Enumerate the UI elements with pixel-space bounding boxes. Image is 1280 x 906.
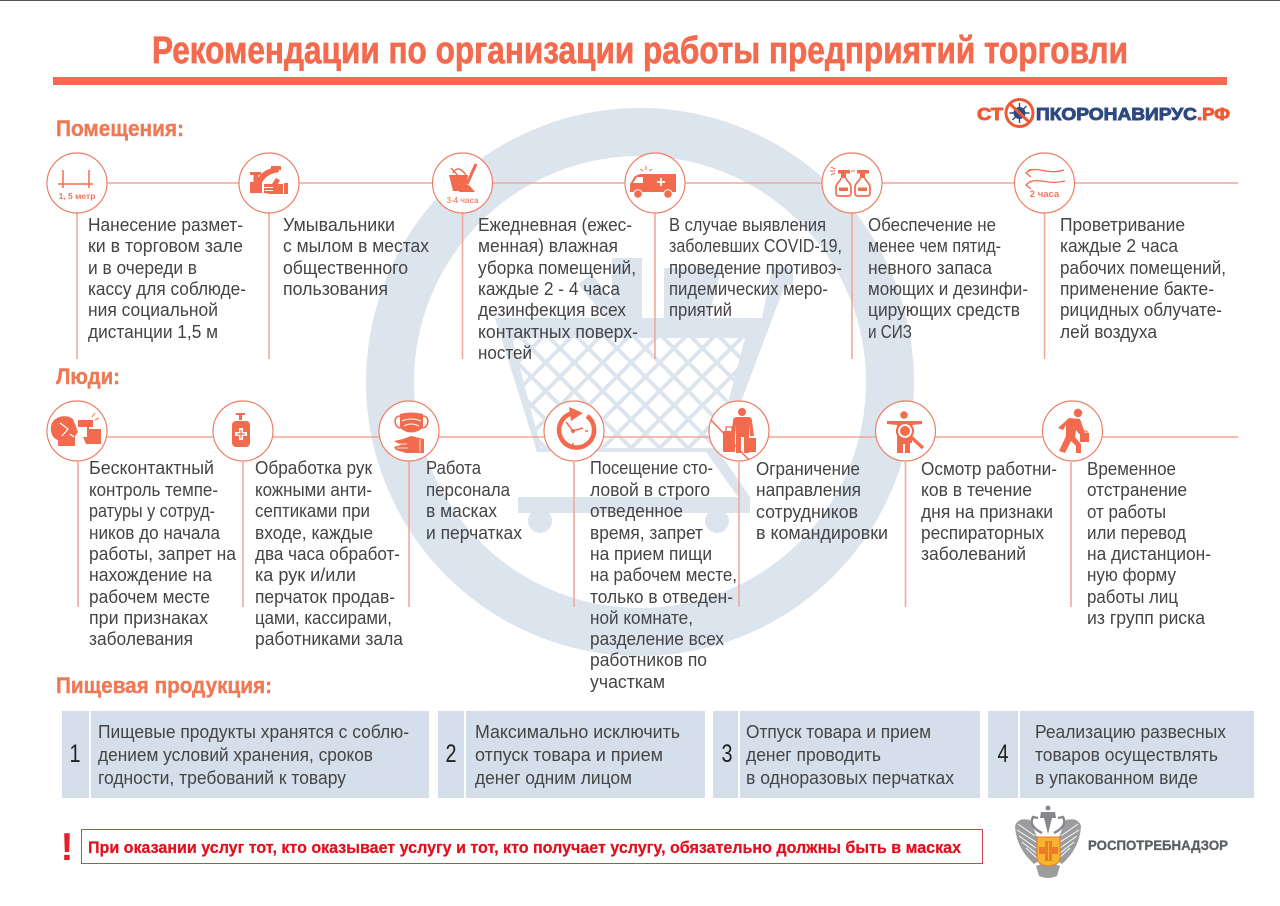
panel: food rule 1 bbox=[62, 711, 429, 798]
heading: premises: Помещения: bbox=[56, 116, 184, 141]
text: canteen: участкам bbox=[590, 671, 665, 692]
text: hand treatment: работниками зала bbox=[255, 628, 404, 649]
text: cleaning bbox=[478, 214, 638, 363]
panel: food rule 1: годности, требований к товару bbox=[98, 767, 347, 788]
text: canteen: на рабочем месте, bbox=[590, 564, 737, 585]
icon: bucket and mop: 3-4 часа bbox=[447, 196, 479, 205]
text: staff inspection: ков в течение bbox=[921, 479, 1032, 500]
text: wash basins: Умывальники bbox=[283, 214, 395, 235]
text: removal from work: ную форму bbox=[1087, 564, 1177, 585]
logo: rospotrebnadzor eagle bbox=[1015, 806, 1081, 878]
panel: food rule 4: Реализацию развесных bbox=[1035, 721, 1227, 742]
text: supplies: моющих и дезинфи- bbox=[868, 278, 1028, 299]
icon: contactless thermometer bbox=[47, 401, 107, 461]
text: business trips bbox=[756, 458, 888, 543]
text: marking: и в очереди в bbox=[88, 257, 197, 278]
text: temperature control: при признаках bbox=[89, 607, 209, 628]
text: covid response: проведение противоэ- bbox=[669, 257, 842, 278]
text: masks and gloves: персонала bbox=[426, 479, 511, 500]
text: canteen: время, запрет bbox=[590, 522, 703, 543]
icon: ambulance van bbox=[625, 153, 685, 213]
panel: food rule 3: Отпуск товара и прием bbox=[746, 721, 931, 742]
text: cleaning: Ежедневная (ежес- bbox=[478, 214, 632, 235]
panel: food rule 3: денег проводить bbox=[746, 744, 881, 765]
text: covid response: приятий bbox=[669, 299, 732, 320]
text: masks and gloves: и перчатках bbox=[426, 522, 523, 543]
panel: food rule 3: 3 bbox=[722, 740, 732, 768]
text: masks and gloves bbox=[426, 457, 523, 543]
text: masks and gloves: Работа bbox=[426, 457, 482, 478]
panel: premises timeline bbox=[47, 153, 1238, 363]
text: supplies: Обеспечение не bbox=[868, 214, 996, 235]
text: covid response: В случае выявления bbox=[669, 214, 826, 235]
icon: sanitizer bottle bbox=[213, 401, 273, 461]
icon: spray bottles bbox=[822, 153, 882, 213]
panel: food rule 2: 2 bbox=[446, 740, 456, 768]
heading: food products: Пищевая продукция: bbox=[56, 673, 272, 698]
panel: food rule 1: дением условий хранения, сроков bbox=[98, 744, 373, 765]
callout: mask warning: При оказании услуг тот, кто оказывает услугу и тот, кто получает услугу, обязательно должны быть в масках bbox=[88, 838, 962, 857]
logo text: rospotrebnadzor: РОСПОТРЕБНАДЗОР bbox=[1088, 838, 1228, 853]
text: business trips: Ограничение bbox=[756, 458, 860, 479]
panel: food rule 2 bbox=[438, 711, 705, 798]
text: business trips: сотрудников bbox=[756, 501, 858, 522]
text: hand treatment: септиками при bbox=[255, 500, 370, 521]
title underline bar bbox=[53, 77, 1227, 85]
panel: food rule 4: в упакованном виде bbox=[1035, 767, 1198, 788]
text: wash basins: пользования bbox=[283, 278, 388, 299]
callout: mask warning: ! bbox=[60, 826, 74, 869]
text: marking: Нанесение размет- bbox=[88, 214, 243, 235]
text: covid response: заболевших COVID-19, bbox=[669, 235, 842, 256]
text: temperature control: рабочем месте bbox=[89, 586, 210, 607]
icon: person leaving with bag bbox=[1042, 401, 1102, 461]
panel: food rule 3: в одноразовых перчатках bbox=[746, 767, 955, 788]
icon: distance marking: 1, 5 метр bbox=[59, 191, 95, 201]
text: removal from work: отстранение bbox=[1087, 479, 1187, 500]
text: business trips: направления bbox=[756, 479, 861, 500]
text: staff inspection: дня на признаки bbox=[921, 501, 1053, 522]
text: removal from work: Временное bbox=[1087, 458, 1176, 479]
text: removal from work: из групп риска bbox=[1087, 607, 1206, 628]
text: hand treatment: цами, кассирами, bbox=[255, 607, 392, 628]
text: ventilation: рицидных облучате- bbox=[1060, 299, 1222, 320]
text: hand treatment: два часа обработ- bbox=[255, 543, 400, 564]
panel: food rule 2: отпуск товара и прием bbox=[475, 744, 663, 765]
text: ventilation bbox=[1060, 214, 1226, 342]
panel: people timeline bbox=[47, 401, 1238, 692]
text: hand treatment: перчаток продав- bbox=[255, 586, 395, 607]
panel: food rule 3 bbox=[713, 711, 980, 798]
text: cleaning: каждые 2 - 4 часа bbox=[478, 278, 621, 299]
text: canteen: Посещение сто- bbox=[590, 457, 713, 478]
text: removal from work: от работы bbox=[1087, 501, 1166, 522]
icon: distance marking bbox=[47, 153, 107, 213]
text: hand treatment: Обработка рук bbox=[255, 457, 373, 478]
text: removal from work bbox=[1087, 458, 1211, 628]
text: marking: кассу для соблюде- bbox=[88, 278, 246, 299]
callout: mask warning bbox=[60, 826, 982, 869]
text: staff inspection: Осмотр работни- bbox=[921, 458, 1057, 479]
text: cleaning: менная) влажная bbox=[478, 235, 618, 256]
text: marking bbox=[88, 214, 246, 342]
text: covid response: пидемических меро- bbox=[669, 278, 828, 299]
logo: stopcoronavirus: .РФ bbox=[1197, 104, 1230, 124]
watermark: shopping cart in a ring bbox=[390, 132, 890, 632]
text: removal from work: или перевод bbox=[1087, 522, 1186, 543]
text: temperature control: ратуры у сотруд- bbox=[89, 500, 215, 521]
icon: mask and gloves bbox=[379, 401, 439, 461]
panel: food rule 2: Максимально исключить bbox=[475, 721, 680, 742]
panel: food rule 4 bbox=[988, 711, 1254, 798]
icon: body inspection bbox=[876, 401, 936, 461]
panel: food rule 4: товаров осуществлять bbox=[1035, 744, 1218, 765]
text: marking: ния социальной bbox=[88, 299, 218, 320]
text: temperature control: нахождение на bbox=[89, 564, 213, 585]
text: temperature control: ников до начала bbox=[89, 522, 221, 543]
icon: tap and hand bbox=[239, 153, 299, 213]
text: cleaning: уборка помещений, bbox=[478, 257, 636, 278]
text: wash basins bbox=[283, 214, 430, 299]
text: staff inspection: респираторных bbox=[921, 522, 1045, 543]
text: hand treatment: входе, каждые bbox=[255, 522, 373, 543]
heading: people: Люди: bbox=[56, 364, 120, 389]
text: cleaning: контактных поверх- bbox=[478, 321, 638, 342]
text: canteen: на прием пищи bbox=[590, 543, 712, 564]
text: hand treatment: кожными анти- bbox=[255, 479, 372, 500]
text: canteen bbox=[590, 457, 737, 692]
text: wash basins: общественного bbox=[283, 257, 408, 278]
text: canteen: разделение всех bbox=[590, 628, 725, 649]
text: ventilation: рабочих помещений, bbox=[1060, 257, 1226, 278]
text: canteen: отведенное bbox=[590, 500, 683, 521]
icon: clock with arrow bbox=[544, 401, 604, 461]
icon: traveller crossed out bbox=[709, 401, 769, 461]
text: business trips: в командировки bbox=[756, 522, 888, 543]
text: marking: ки в торговом зале bbox=[88, 235, 243, 256]
panel: food rule 2: денег одним лицом bbox=[475, 767, 632, 788]
logo: stopcoronavirus: СТ bbox=[977, 104, 1003, 124]
panel: food rule 1: Пищевые продукты хранятся с соблю- bbox=[98, 721, 409, 742]
text: ventilation: лей воздуха bbox=[1060, 321, 1158, 342]
text: temperature control: контроль темпе- bbox=[89, 479, 218, 500]
text: hand treatment bbox=[255, 457, 404, 649]
text: hand treatment: ка рук и/или bbox=[255, 564, 356, 585]
text: masks and gloves: в масках bbox=[426, 500, 498, 521]
text: cleaning: дезинфекция всех bbox=[478, 299, 627, 320]
text: removal from work: на дистанцион- bbox=[1087, 543, 1211, 564]
icon: air flow: 2 часа bbox=[1030, 189, 1060, 200]
text: supplies bbox=[868, 214, 1028, 342]
text: canteen: работников по bbox=[590, 649, 707, 670]
text: removal from work: работы лиц bbox=[1087, 586, 1178, 607]
text: supplies: менее чем пятид- bbox=[868, 235, 1001, 256]
text: temperature control: заболевания bbox=[89, 628, 193, 649]
text: temperature control: работы, запрет на bbox=[89, 543, 237, 564]
text: ventilation: применение бакте- bbox=[1060, 278, 1214, 299]
text: supplies: невного запаса bbox=[868, 257, 993, 278]
text: supplies: и СИЗ bbox=[868, 321, 912, 342]
text: ventilation: каждые 2 часа bbox=[1060, 235, 1179, 256]
text: ventilation: Проветривание bbox=[1060, 214, 1185, 235]
text: supplies: цирующих средств bbox=[868, 299, 1020, 320]
text: staff inspection bbox=[921, 458, 1057, 564]
text: temperature control bbox=[89, 457, 237, 649]
icon: air flow bbox=[1014, 153, 1074, 213]
panel: food rule 4: 4 bbox=[998, 740, 1009, 768]
text: staff inspection: заболеваний bbox=[921, 543, 1026, 564]
icon: bucket and mop bbox=[432, 153, 492, 213]
text: canteen: ловой в строго bbox=[590, 479, 710, 500]
text: marking: дистанции 1,5 м bbox=[88, 321, 218, 342]
text: canteen: ной комнате, bbox=[590, 607, 693, 628]
text: wash basins: с мылом в местах bbox=[283, 235, 430, 256]
logo: stopcoronavirus bbox=[977, 100, 1230, 126]
text: covid response bbox=[669, 214, 842, 320]
text: canteen: только в отведен- bbox=[590, 586, 733, 607]
logo: stopcoronavirus: ПКОРОНАВИРУС bbox=[1036, 104, 1197, 124]
panel: food rule 1: 1 bbox=[70, 740, 80, 768]
text: temperature control: Бесконтактный bbox=[89, 457, 214, 478]
text: cleaning: ностей bbox=[478, 342, 532, 363]
